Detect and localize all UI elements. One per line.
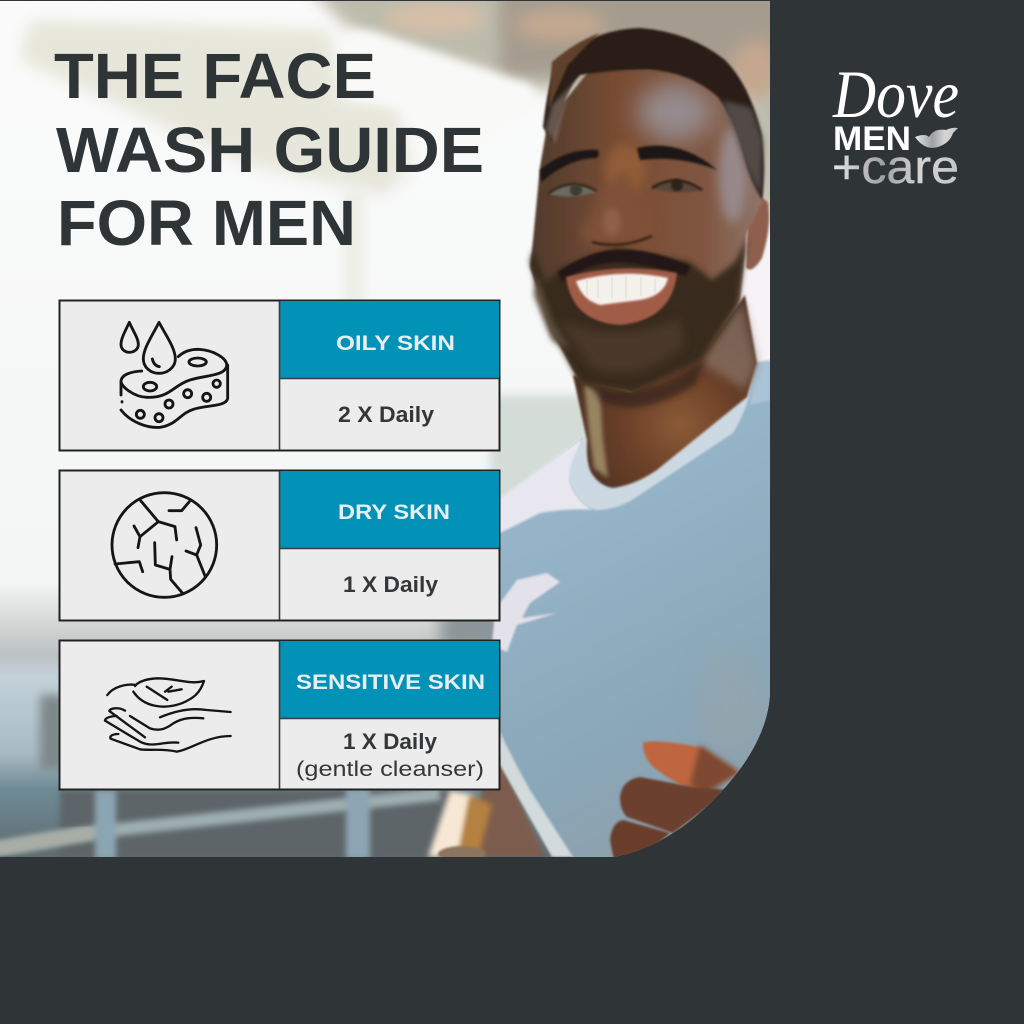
hair [543,28,764,200]
moustache [558,250,690,282]
shirt: sun patch [492,573,560,652]
frequency: 2 x daily: 2 X Daily [338,402,435,427]
icon: dove bird [915,128,958,148]
frequency: 1 x daily gentle cleanser: (gentle cleanser) [296,758,484,781]
beard [530,238,747,393]
logo: Dove Men+Care: +care [832,140,959,193]
title [54,40,484,259]
label: sensitive skin: SENSITIVE SKIN [296,670,485,694]
frequency: 1 x daily gentle cleanser [296,729,484,781]
panel: oily skin [60,300,500,450]
title: WASH GUIDE [56,114,484,186]
forehead highlight [637,82,713,142]
photo panel: smiling man [0,0,790,862]
title: THE FACE [54,40,376,112]
icon: hands holding leaf [105,678,231,752]
nose [580,170,653,245]
logo: Dove Men+Care [832,56,959,193]
eye left [548,184,597,197]
eye right [652,179,702,193]
panel: sensitive skin [60,640,500,790]
t-shirt [490,360,770,860]
shirt: lower seam [500,735,573,857]
sideburn fade [544,81,574,142]
panel: dry skin [60,470,500,620]
eyebrow right [637,146,717,170]
hand [610,741,740,860]
icon: sponge with drops [121,322,228,427]
icon: cracked circle [112,493,217,597]
photo backdrop [0,0,790,860]
label: dry skin: DRY SKIN [338,500,450,524]
head [530,28,764,393]
frequency: 1 x daily: 1 X Daily [343,572,439,597]
ear [746,198,769,270]
neck [573,295,757,488]
logo: Dove Men+Care: MEN [833,120,911,158]
frequency: 1 x daily gentle cleanser: 1 X Daily [343,729,438,754]
eyebrow left [540,150,599,182]
logo: Dove Men+Care: Dove [832,56,959,132]
title: FOR MEN [57,187,356,259]
shirt: collar [569,363,757,510]
mouth [566,268,677,325]
shirt: sunlit shoulder [500,438,592,534]
arm [425,756,545,857]
label: oily skin: OILY SKIN [336,331,455,355]
